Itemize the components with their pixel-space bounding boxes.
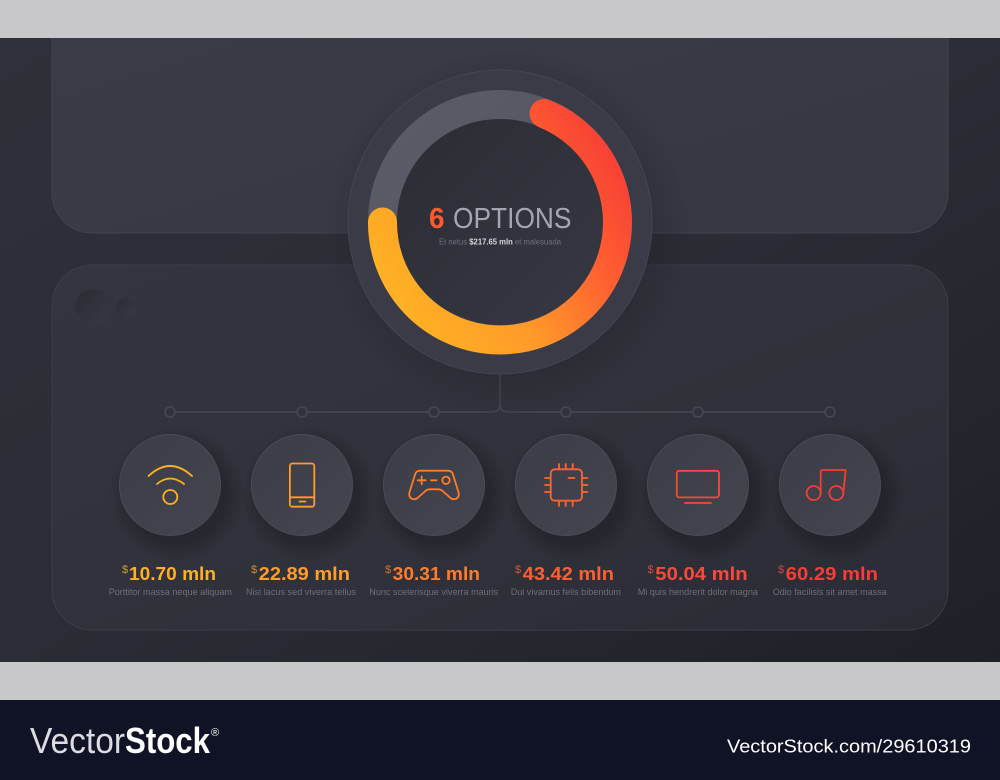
footer bar: [0, 700, 1000, 780]
decorative dimples: [75, 289, 136, 325]
amount: $: [122, 564, 128, 576]
button shadow: [637, 426, 773, 562]
option 2: phone: [241, 426, 377, 598]
option 4: chip: [505, 426, 641, 598]
button shadow: [373, 426, 509, 562]
amount: $: [515, 564, 521, 576]
amount: 60.29 mln: [786, 563, 878, 584]
icon: music note: [807, 470, 846, 500]
amount: $: [648, 564, 654, 576]
button: [252, 434, 352, 536]
icon: gamepad: [409, 471, 459, 499]
caption: Nunc scelerisque viverra mauris: [369, 587, 499, 598]
icon: wifi: [148, 466, 192, 504]
icon: chip: [545, 464, 588, 506]
panel: lower card: [52, 265, 948, 630]
caption: Dui vivamus felis bibendum: [511, 587, 621, 598]
button: [384, 434, 484, 536]
caption: Mi quis hendrerit dolor magna: [638, 587, 759, 598]
dark stage background: [0, 38, 1000, 662]
caption: Odio facilisis sit amet massa: [773, 587, 887, 598]
amount: 50.04 mln: [655, 563, 748, 584]
button shadow: [505, 426, 641, 562]
button: [648, 434, 748, 536]
amount: 43.42 mln: [523, 563, 614, 584]
button shadow: [109, 426, 245, 562]
option 6: music: [769, 426, 905, 598]
gradient progress arc: [382, 114, 617, 340]
button: [780, 434, 880, 536]
grey track ring: [382, 104, 618, 340]
amount: 22.89 mln: [259, 563, 350, 584]
footer image id: VectorStock.com/29610319: [727, 736, 971, 756]
connector tree with nodes: [165, 372, 835, 417]
icon: monitor: [677, 471, 719, 503]
footer logo: [30, 720, 219, 761]
center heading: 6: [429, 203, 444, 235]
amount: $: [385, 564, 391, 576]
outer disc: [348, 70, 652, 374]
caption: Porttitor massa neque aliquam: [109, 587, 232, 598]
amount: 10.70 mln: [129, 563, 216, 584]
center heading label: OPTIONS: [453, 203, 572, 235]
center caption: Et netus $217.65 mln et malesuada: [439, 238, 562, 246]
inner dark disc: [397, 119, 603, 325]
icon: phone: [290, 464, 314, 507]
soft disc shadow: [323, 47, 693, 417]
amount: 30.31 mln: [393, 563, 480, 584]
option 5: monitor: [637, 426, 773, 598]
panel: top card: [52, 38, 948, 234]
amount: $: [251, 564, 257, 576]
footer logo: Vector: [30, 720, 125, 761]
button: [120, 434, 220, 536]
caption: Nisi lacus sed viverra tellus: [246, 587, 356, 598]
button shadow: [241, 426, 377, 562]
option 3: game controller: [369, 426, 509, 598]
option 1: wifi: [109, 426, 245, 598]
footer logo: ®: [211, 727, 219, 739]
amount: $: [778, 564, 784, 576]
button shadow: [769, 426, 905, 562]
donut chart: [323, 47, 693, 417]
footer logo: Stock: [125, 720, 211, 761]
button: [516, 434, 616, 536]
